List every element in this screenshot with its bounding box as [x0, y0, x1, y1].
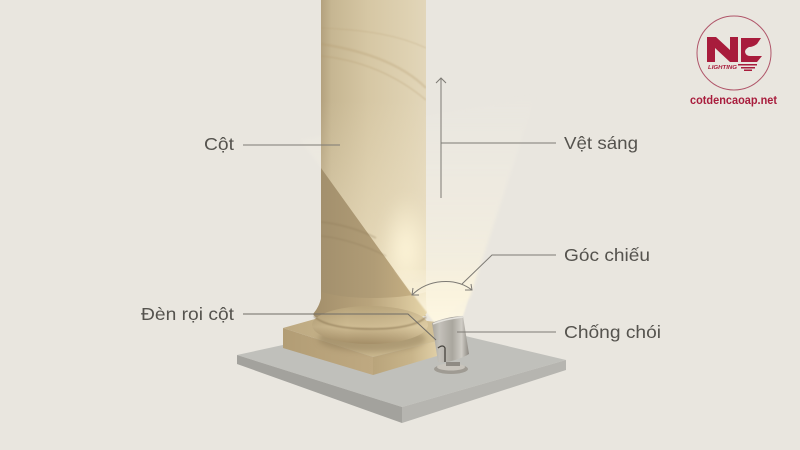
line: Chống chói — [457, 331, 556, 333]
label: Vệt sáng: Vệt sáng — [564, 133, 638, 153]
arrow: light direction — [436, 78, 446, 198]
label: Cột: Cột — [204, 134, 234, 154]
lit lower shaft — [321, 100, 426, 300]
lamp fixture — [432, 316, 469, 374]
warm glow — [387, 212, 423, 276]
logo letters — [707, 37, 738, 62]
line: Đèn rọi cột — [243, 314, 436, 340]
logo word: LIGHTING — [708, 65, 738, 71]
light beam on background — [300, 95, 536, 325]
lamp beam over base — [394, 270, 478, 324]
arrow: beam angle arc — [412, 281, 472, 295]
label: Góc chiếu: Góc chiếu — [564, 245, 650, 265]
shadowed column section — [321, 168, 426, 316]
line: Cột — [243, 144, 340, 146]
lamp base — [434, 364, 468, 374]
logo bulb base — [738, 64, 757, 71]
logo: NC Lighting — [697, 16, 771, 90]
stone plinth — [283, 312, 437, 375]
concrete slab — [237, 320, 566, 423]
label: Đèn rọi cột: Đèn rọi cột — [141, 304, 234, 324]
lamp body — [432, 316, 469, 362]
logo website text: cotdencaoap.net — [690, 93, 777, 107]
base torus — [312, 292, 428, 344]
column shaft — [321, 0, 426, 300]
logo ring — [697, 16, 771, 90]
shadow veining — [368, 232, 386, 256]
line: Góc chiếu — [462, 255, 556, 284]
label: Chống chói: Chống chói — [564, 322, 661, 342]
stone veining — [330, 34, 426, 100]
line: Vệt sáng — [441, 142, 556, 144]
lamp bracket — [438, 346, 445, 362]
column — [312, 0, 432, 344]
